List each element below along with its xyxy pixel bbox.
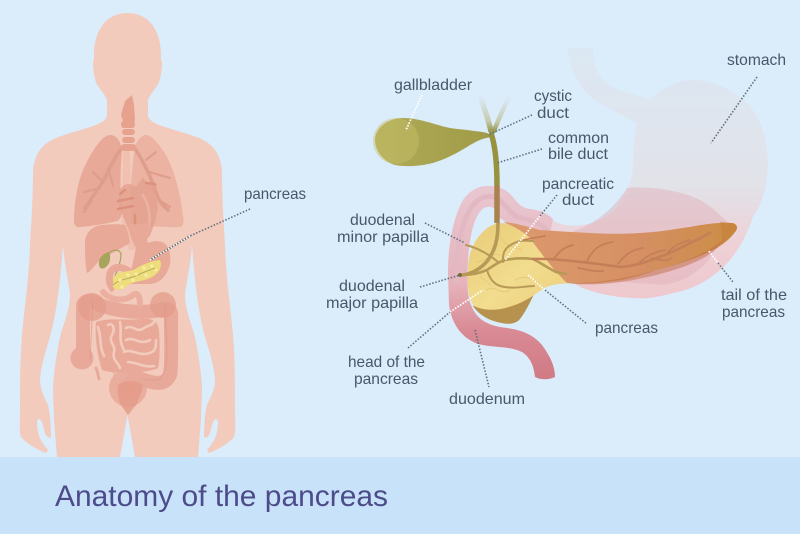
title band [0,457,800,534]
label: common bile duct [548,130,609,163]
label: cystic duct [534,88,572,122]
duodenum [448,186,555,379]
label: gallbladder: gallbladder [394,77,473,94]
papilla marker [458,273,462,277]
small intestine [96,292,160,373]
gallbladder highlight [373,118,419,164]
gallbladder [373,118,492,166]
duodenum inner band [457,196,548,283]
label: cystic duct: duct [537,105,570,122]
trachea [121,95,136,151]
label: duodenal minor papilla: duodenal [350,212,415,229]
title: Anatomy of the pancreas [55,480,388,513]
label: duodenal minor papilla: minor papilla [337,229,429,246]
small pancreas [113,260,161,290]
label: duodenum: duodenum [449,391,525,408]
label: common bile duct: common [548,130,609,147]
pancreas body [503,222,737,284]
label: head of the pancreas: head of the [348,354,425,371]
pancreas [468,222,737,324]
duodenum loop [109,267,130,290]
heart [118,177,158,244]
pancreatic ducts [461,233,710,288]
label: tail of the pancreas [721,287,787,321]
label: pancreas (body): pancreas [244,186,306,203]
label: pancreas: pancreas [595,320,658,337]
label: duodenal minor papilla [337,212,429,246]
label: stomach: stomach [727,52,786,69]
label: common bile duct: bile duct [548,146,609,163]
label: tail of the pancreas: pancreas [722,304,785,321]
stomach [540,48,768,298]
left lung [74,135,122,227]
label: cystic duct: cystic [534,88,572,105]
label: pancreatic duct: duct [562,192,595,209]
gallbladder [99,250,121,280]
liver [85,224,130,273]
stomach [127,222,170,284]
uncinate process [473,290,536,324]
label: head of the pancreas [348,354,425,388]
label: duodenal major papilla [326,278,418,312]
large intestine [73,292,176,390]
label: duodenal major papilla: duodenal [339,278,405,295]
cystic duct branches [481,98,508,131]
label: head of the pancreas: pancreas [354,371,418,388]
bladder and rectum [109,369,147,415]
pancreas head [468,223,570,310]
human body silhouette [20,13,235,457]
lower edge shade [567,238,725,284]
appendix [96,368,99,379]
stomach inner fold [560,188,730,285]
label: duodenal major papilla: major papilla [326,295,418,312]
lobule texture [476,236,540,292]
pancreas tail shade [720,222,737,243]
label: pancreatic duct: pancreatic [542,176,614,193]
leader lines [150,77,757,387]
right lung [130,135,184,227]
label: pancreatic duct [542,176,614,209]
bronchi [84,149,170,212]
body organs [73,95,184,415]
common bile duct [462,133,498,275]
esophagus [122,151,137,250]
label: tail of the pancreas: tail of the [721,287,787,304]
